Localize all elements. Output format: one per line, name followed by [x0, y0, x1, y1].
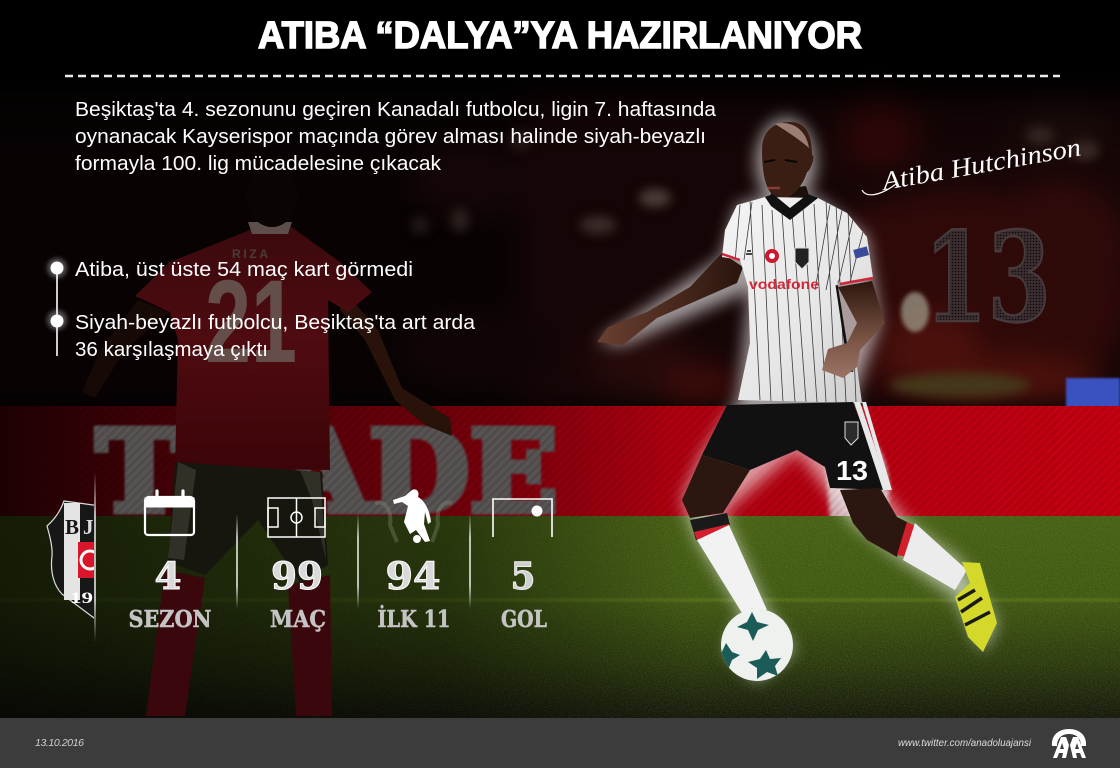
rear player in red: RIZA — [232, 247, 268, 261]
bullet list: 36 karşılaşmaya çıktı — [75, 339, 268, 361]
shorts: 13 — [836, 455, 868, 486]
date: 13.10.2016 — [35, 737, 84, 749]
stat: 4 sezon: 4 — [154, 554, 182, 598]
Beşiktaş crest, half-cropped: B — [65, 515, 79, 539]
dashed divider under title — [65, 75, 1060, 77]
stat: 5 gol: GOL — [501, 606, 547, 633]
head — [762, 122, 813, 212]
rear player in red: 21 — [205, 256, 297, 388]
jersey — [722, 194, 873, 403]
stat: 4 sezon — [128, 491, 212, 633]
bokeh highlights — [411, 126, 1099, 397]
jersey: vodafone — [749, 277, 820, 292]
intro text block: Beşiktaş'ta 4. sezonunu geçiren Kanadalı futbolcu, ligin 7. haftasında — [75, 99, 717, 121]
icon: calendar — [145, 491, 194, 535]
stat: 99 maç: 99 — [271, 554, 323, 598]
red advertising band — [0, 406, 1120, 516]
signature: Atiba Hutchinson: Atiba Hutchinson — [878, 132, 1083, 196]
left arm — [597, 253, 743, 345]
left leg — [682, 455, 767, 613]
bullet list: Siyah-beyazlı futbolcu, Beşiktaş'ta art arda — [75, 312, 476, 334]
stat: 5 gol: 5 — [510, 554, 536, 598]
player glow — [597, 118, 997, 682]
stat: 99 maç — [268, 498, 326, 633]
icon: football pitch — [268, 498, 325, 537]
logo: Anadolu Agency — [1052, 729, 1086, 758]
icon: goal with ball — [493, 499, 552, 537]
twitter address: www.twitter.com/anadoluajansi — [898, 737, 1032, 749]
featured player: Atiba Hutchinson — [597, 118, 997, 682]
right leg — [840, 488, 967, 590]
shorts — [702, 402, 892, 490]
stat: 4 sezon: SEZON — [128, 606, 212, 633]
stat: 94 ilk 11: İLK 11 — [378, 605, 450, 633]
bullet list: Atiba, üst üste 54 maç kart görmedi — [75, 259, 413, 281]
bullet list — [47, 258, 476, 361]
grass pitch — [0, 516, 1120, 718]
footer bar — [0, 718, 1120, 768]
intro text block — [75, 99, 717, 175]
Beşiktaş crest, half-cropped — [47, 501, 100, 618]
right arm — [822, 281, 885, 378]
football — [720, 609, 793, 681]
stat: 94 ilk 11: 94 — [386, 554, 440, 598]
Beşiktaş crest, half-cropped: 19 — [70, 590, 93, 607]
stat: 5 gol — [493, 499, 552, 633]
title: ATIBA “DALYA”YA HAZIRLANIYOR — [258, 15, 862, 57]
boot — [955, 562, 997, 652]
vertical dividers — [94, 472, 471, 642]
Beşiktaş crest, half-cropped: J — [83, 515, 94, 539]
icon: footballer silhouette — [375, 489, 452, 543]
jersey number 13: 13 — [924, 206, 1051, 351]
stat: 94 ilk 11 — [375, 489, 452, 633]
red advertising band: TRADE — [96, 407, 558, 538]
stat: 99 maç: MAÇ — [270, 606, 326, 633]
intro text block: oynanacak Kayserispor maçında görev alması halinde siyah-beyazlı — [75, 126, 706, 148]
rear player in red — [82, 163, 452, 716]
intro text block: formayla 100. lig mücadelesine çıkacak — [75, 153, 442, 175]
blurred crowd — [0, 90, 1120, 410]
